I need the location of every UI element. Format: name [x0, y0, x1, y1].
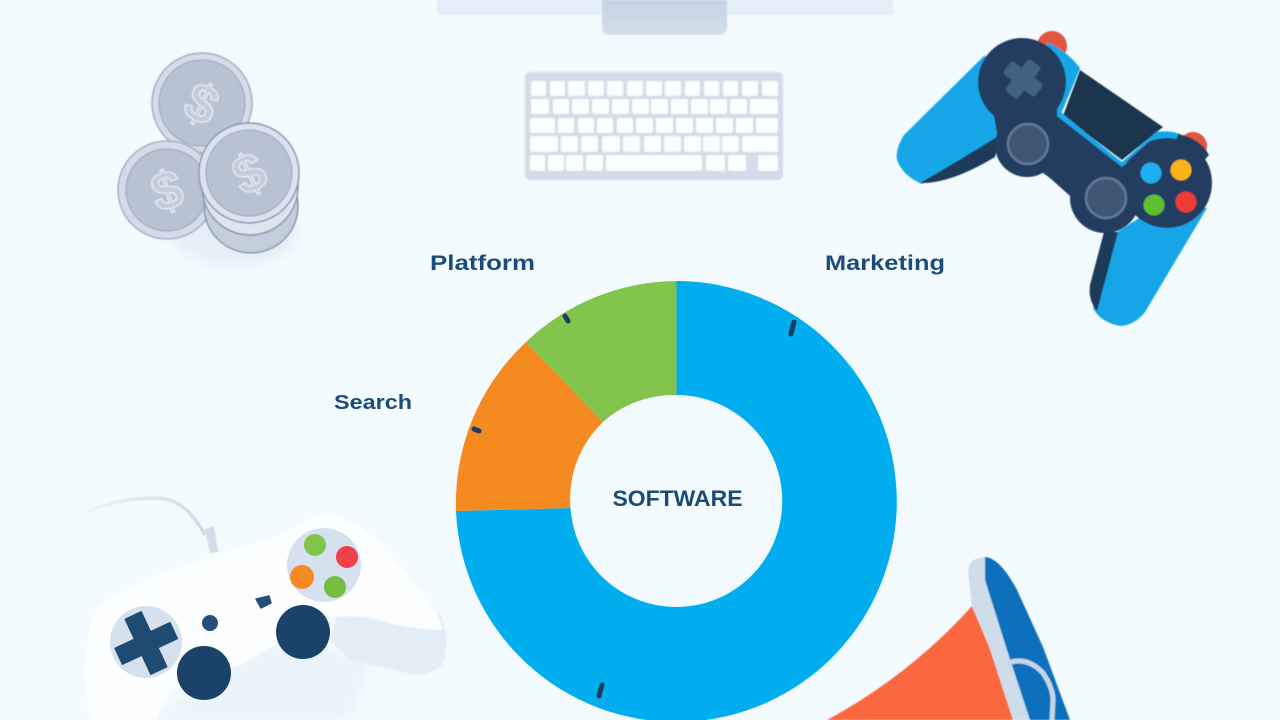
- sticks: [1008, 124, 1048, 164]
- label: Platform: Platform: [430, 252, 535, 275]
- sticks: [177, 646, 231, 700]
- icon: blue game controller: [897, 31, 1212, 326]
- button pad: [287, 528, 361, 602]
- coin left: $: [145, 158, 190, 224]
- segment: blue: [456, 281, 897, 720]
- coin top: $: [175, 70, 228, 137]
- coin top: [152, 53, 252, 153]
- cable: [88, 498, 205, 535]
- touchpad accent: [1060, 70, 1158, 164]
- left grip: [897, 55, 1000, 184]
- coin left: [118, 141, 216, 239]
- coin stack: [199, 123, 299, 253]
- icon: keyboard: [525, 72, 783, 180]
- donut chart: [456, 281, 897, 720]
- dark body: [978, 38, 1212, 233]
- d-pad: [995, 51, 1051, 107]
- icon: megaphone: [827, 557, 1070, 720]
- d-pad: [110, 606, 182, 678]
- light rim: [968, 557, 1030, 720]
- touchpad: [1063, 70, 1163, 160]
- center label: SOFTWARE: [612, 486, 742, 511]
- segment: orange: [456, 342, 603, 511]
- small buttons: [202, 615, 218, 631]
- label: Marketing: Marketing: [825, 252, 945, 275]
- icon: white game controller: [85, 498, 447, 720]
- blue mouth: [985, 557, 1070, 720]
- cable plug: [205, 526, 218, 553]
- icon: monitor base: [437, 0, 893, 35]
- coin stack: $: [223, 140, 276, 207]
- segment: green: [526, 281, 676, 422]
- body: [85, 513, 443, 720]
- face buttons: [1140, 162, 1162, 184]
- upper blue rim: [1047, 42, 1190, 172]
- right grip: [1093, 205, 1207, 326]
- lower shadow: [150, 640, 370, 720]
- red bumpers: [1037, 31, 1207, 160]
- tick marks: [474, 316, 794, 696]
- handle: [1008, 661, 1053, 720]
- icon: stack of coins: [118, 53, 299, 265]
- cone: [827, 606, 1020, 720]
- shadow: [330, 613, 447, 674]
- label: Search: Search: [334, 392, 412, 414]
